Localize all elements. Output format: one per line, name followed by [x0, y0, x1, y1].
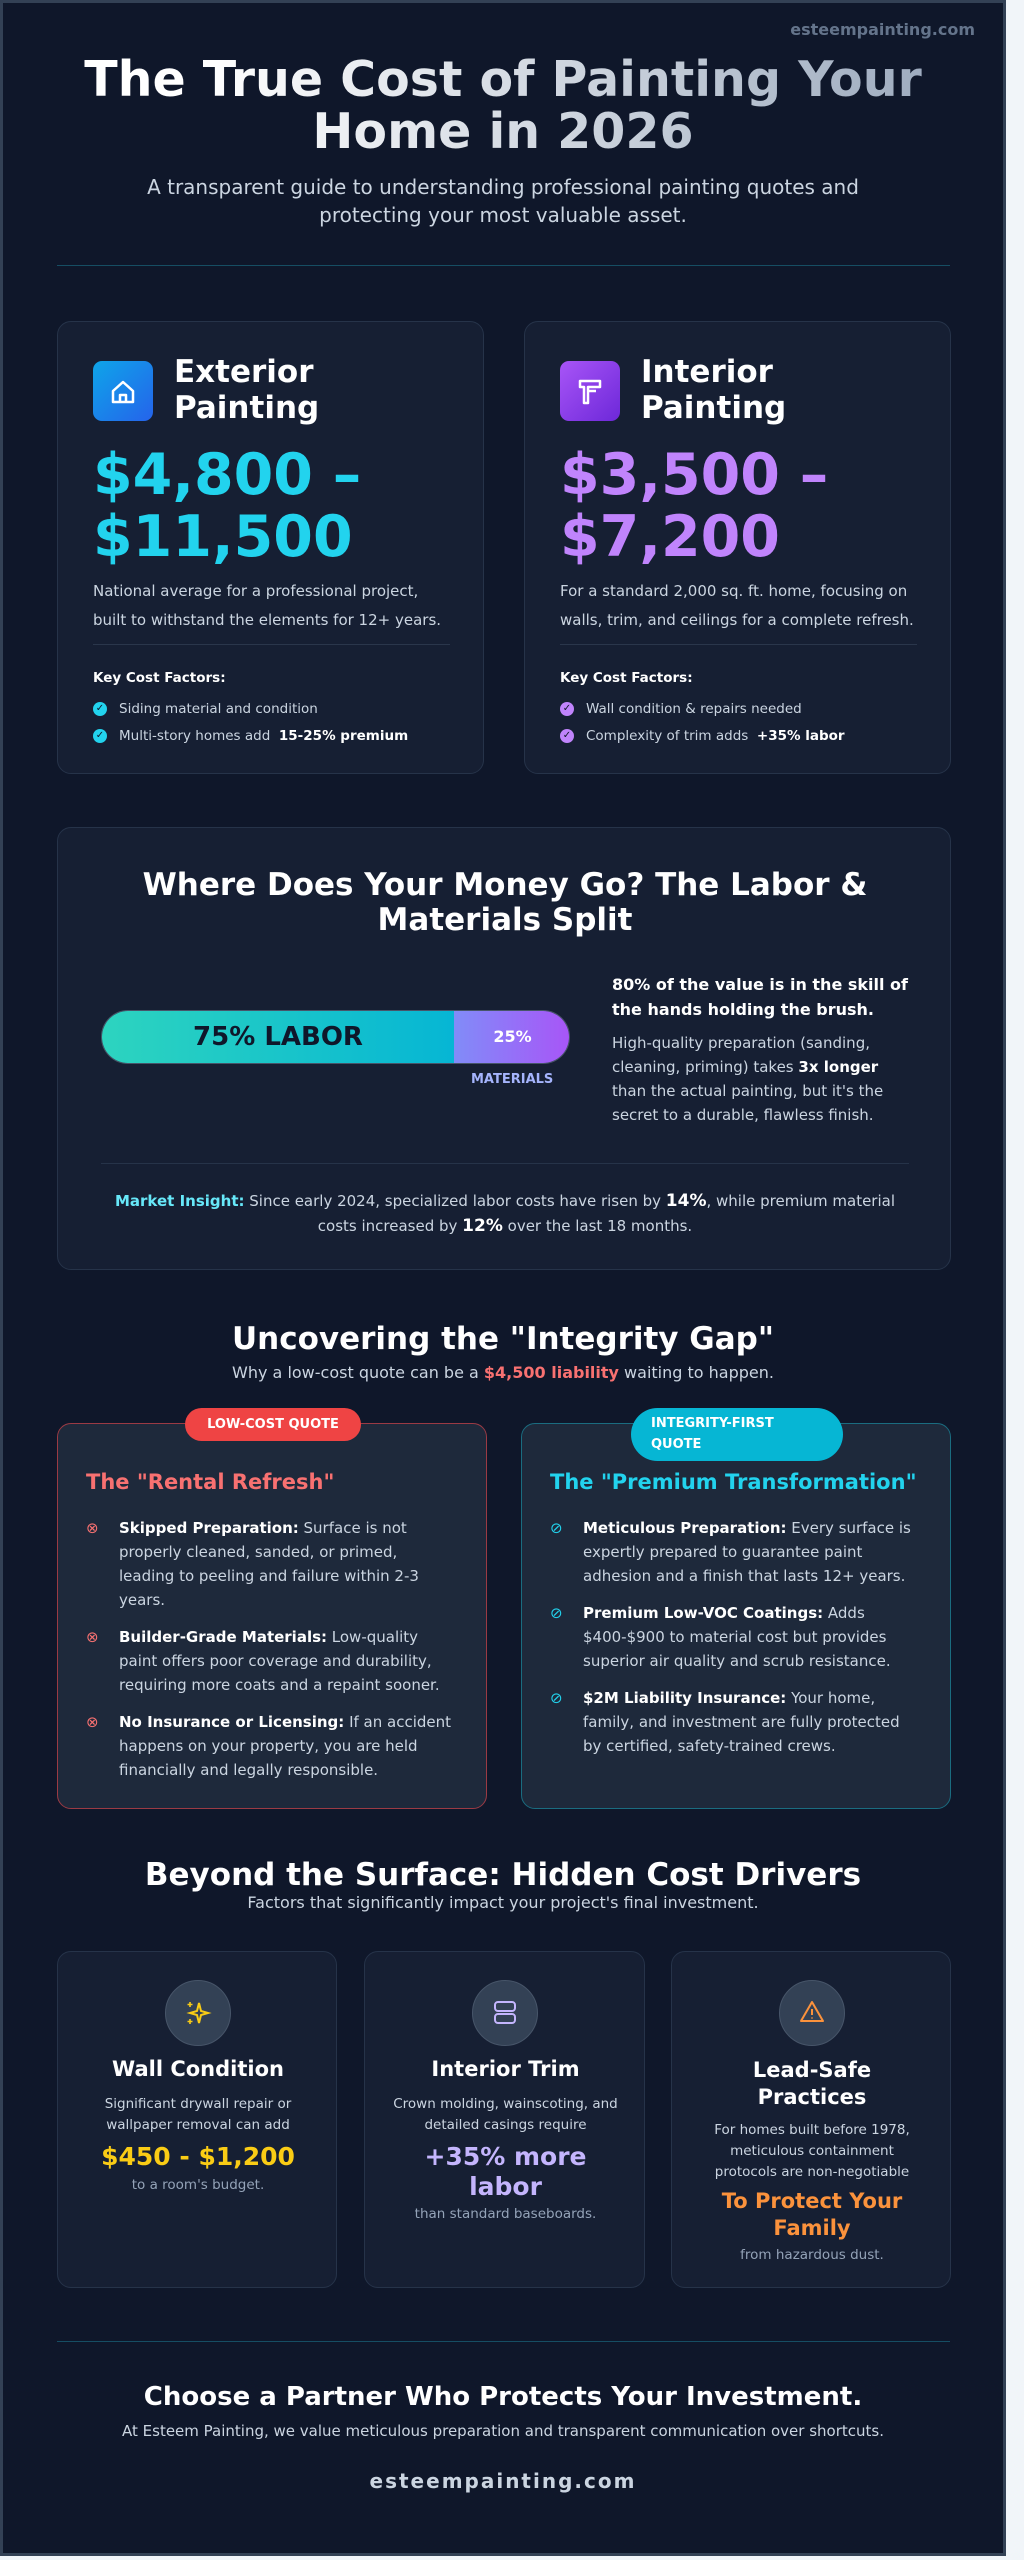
list: ⊘: [550, 1689, 563, 1707]
card heading: The "Rental Refresh": [86, 1470, 334, 1494]
icon: trim: [472, 1980, 538, 2046]
heading: Painting: [174, 390, 319, 426]
price: $7,200: [560, 504, 780, 570]
heading: Exterior: [174, 354, 314, 390]
description: walls, trim, and ceilings for a complete refresh.: [560, 611, 914, 629]
heading: [174, 354, 319, 426]
price: $11,500: [93, 504, 353, 570]
bar chart: 25%: [493, 1027, 532, 1046]
footer call to action: esteempainting.com: [370, 2469, 636, 2493]
panel: interior trim: [364, 1951, 645, 2288]
heading: Where Does Your Money Go? The Labor &: [143, 867, 867, 903]
badge: [631, 1408, 843, 1461]
badge: LOW-COST QUOTE: [207, 1417, 339, 1432]
description: National average for a professional project,: [93, 582, 418, 600]
card title: [753, 2058, 871, 2109]
list: ⊘: [550, 1519, 563, 1537]
panel: lead-safe practices: [671, 1951, 951, 2288]
bar chart: [101, 1010, 570, 1087]
badge: [185, 1408, 361, 1441]
value: [424, 2142, 586, 2201]
subtitle: [147, 175, 859, 227]
key factors: ✓: [563, 730, 571, 741]
footer call to action: [122, 2382, 884, 2493]
key factors: Multi-story homes add 15-25% premium: [119, 728, 408, 744]
icon: sparkle: [165, 1980, 231, 2046]
heading: hidden cost drivers: Factors that significantly impact your project's final investment.: [247, 1893, 759, 1912]
panel: labor & materials split: MATERIALS: [471, 1072, 553, 1087]
key factors: [560, 670, 845, 744]
key factors: ✓: [96, 730, 104, 741]
text: labor explanation: 80% of the value is in the skill of the hands holding the brush.: [612, 975, 908, 1019]
icon: brush: [560, 361, 620, 421]
heading: integrity gap: Uncovering the "Integrity Gap": [232, 1321, 774, 1357]
list: Premium Low-VOC Coatings: Adds $400-$900 to material cost but provides superior air quality and scrub resistance.: [583, 1604, 891, 1670]
panel: lead-safe practices: from hazardous dust.: [740, 2247, 884, 2263]
list: ⊗: [86, 1628, 99, 1646]
panel: integrity-first quote: [521, 1423, 951, 1809]
key factors: Key Cost Factors:: [560, 670, 693, 686]
title: Home in 2026: [312, 103, 694, 160]
key factors: Key Cost Factors:: [93, 670, 226, 686]
card title: Interior Trim: [431, 2057, 580, 2081]
list: ⊘: [550, 1604, 563, 1622]
list: Skipped Preparation: Surface is not properly cleaned, sanded, or primed, leading to peeling and failure within 2-3 years.: [119, 1519, 419, 1609]
footer call to action: Choose a Partner Who Protects Your Investment.: [144, 2382, 862, 2412]
list: ⊗: [86, 1713, 99, 1731]
value: $450 - $1,200: [101, 2142, 295, 2171]
panel: low-cost quote: [57, 1423, 487, 1809]
key factors: Siding material and condition: [119, 701, 318, 717]
description: For a standard 2,000 sq. ft. home, focusing on: [560, 582, 907, 600]
title: The True Cost of Painting Your: [84, 51, 922, 108]
heading: [143, 867, 867, 938]
heading: Painting: [641, 390, 786, 426]
price: $3,500 –: [560, 442, 828, 508]
icon: house: [93, 361, 153, 421]
value: Family: [773, 2216, 851, 2240]
key factors: Complexity of trim adds +35% labor: [586, 728, 845, 744]
list: [550, 1519, 911, 1755]
panel: exterior painting: [57, 321, 484, 774]
footer call to action: At Esteem Painting, we value meticulous preparation and transparent communication over shortcuts.: [122, 2422, 884, 2440]
key factors: [93, 670, 408, 744]
subtitle: A transparent guide to understanding professional painting quotes and: [147, 175, 859, 199]
price: $4,800 –: [93, 442, 361, 508]
text: Significant drywall repair or wallpaper removal can add: [105, 2096, 291, 2133]
panel: wall condition: to a room's budget.: [132, 2177, 264, 2193]
heading: Materials Split: [378, 902, 632, 938]
card title: Practices: [758, 2085, 866, 2109]
panel: interior painting: [524, 321, 951, 774]
badge: QUOTE: [651, 1437, 701, 1452]
icon: warning: [779, 1980, 845, 2046]
text: Crown molding, wainscoting, and detailed casings require: [393, 2096, 618, 2133]
domain tag: esteempainting.com: [790, 20, 975, 39]
price: [560, 442, 828, 570]
key factors: Wall condition & repairs needed: [586, 701, 802, 717]
list: ⊗: [86, 1519, 99, 1537]
heading: hidden cost drivers: [145, 1857, 861, 1912]
card title: Lead-Safe: [753, 2058, 871, 2082]
text: labor explanation: [612, 975, 908, 1124]
list: [86, 1519, 451, 1779]
panel: interior trim: than standard baseboards.: [415, 2206, 596, 2222]
value: To Protect Your: [722, 2189, 902, 2213]
panel: labor & materials split: [57, 827, 951, 1270]
market insight: Market Insight: Since early 2024, specialized labor costs have risen by 14%, while premium material costs increased by 12% over the last 18 months.: [115, 1191, 895, 1236]
panel: wall condition: [57, 1951, 337, 2288]
heading: integrity gap: [232, 1321, 774, 1382]
list: No Insurance or Licensing: If an accident happens on your property, you are held financially and legally responsible.: [119, 1713, 451, 1779]
text: For homes built before 1978, meticulous containment protocols are non-negotiable: [714, 2122, 910, 2180]
heading: [641, 354, 786, 426]
description: [560, 582, 914, 629]
value: [722, 2189, 902, 2240]
description: built to withstand the elements for 12+ years.: [93, 611, 441, 629]
text: labor explanation: High-quality preparation (sanding, cleaning, priming) takes 3x longer than the actual painting, but it's the secret to a durable, flawless finish.: [612, 1034, 883, 1124]
key factors: ✓: [96, 703, 104, 714]
value: +35% more: [424, 2142, 586, 2171]
badge: INTEGRITY-FIRST: [651, 1416, 774, 1431]
card heading: The "Premium Transformation": [550, 1470, 917, 1494]
description: [93, 582, 441, 629]
heading: Interior: [641, 354, 773, 390]
bar chart: 75% LABOR: [193, 1022, 363, 1052]
value: labor: [469, 2172, 542, 2201]
card title: Wall Condition: [112, 2057, 284, 2081]
list: $2M Liability Insurance: Your home, family, and investment are fully protected by certified, safety-trained crews.: [583, 1689, 900, 1755]
title: [3, 54, 1003, 158]
list: Meticulous Preparation: Every surface is expertly prepared to guarantee paint adhesion and a finish that lasts 12+ years.: [583, 1519, 911, 1585]
heading: integrity gap: Why a low-cost quote can be a $4,500 liability waiting to happen.: [232, 1363, 774, 1382]
key factors: ✓: [563, 703, 571, 714]
subtitle: protecting your most valuable asset.: [319, 203, 687, 227]
list: Builder-Grade Materials: Low-quality paint offers poor coverage and durability, requiring more coats and a repaint sooner.: [119, 1628, 440, 1694]
heading: hidden cost drivers: Beyond the Surface: Hidden Cost Drivers: [145, 1857, 861, 1893]
price: [93, 442, 361, 570]
